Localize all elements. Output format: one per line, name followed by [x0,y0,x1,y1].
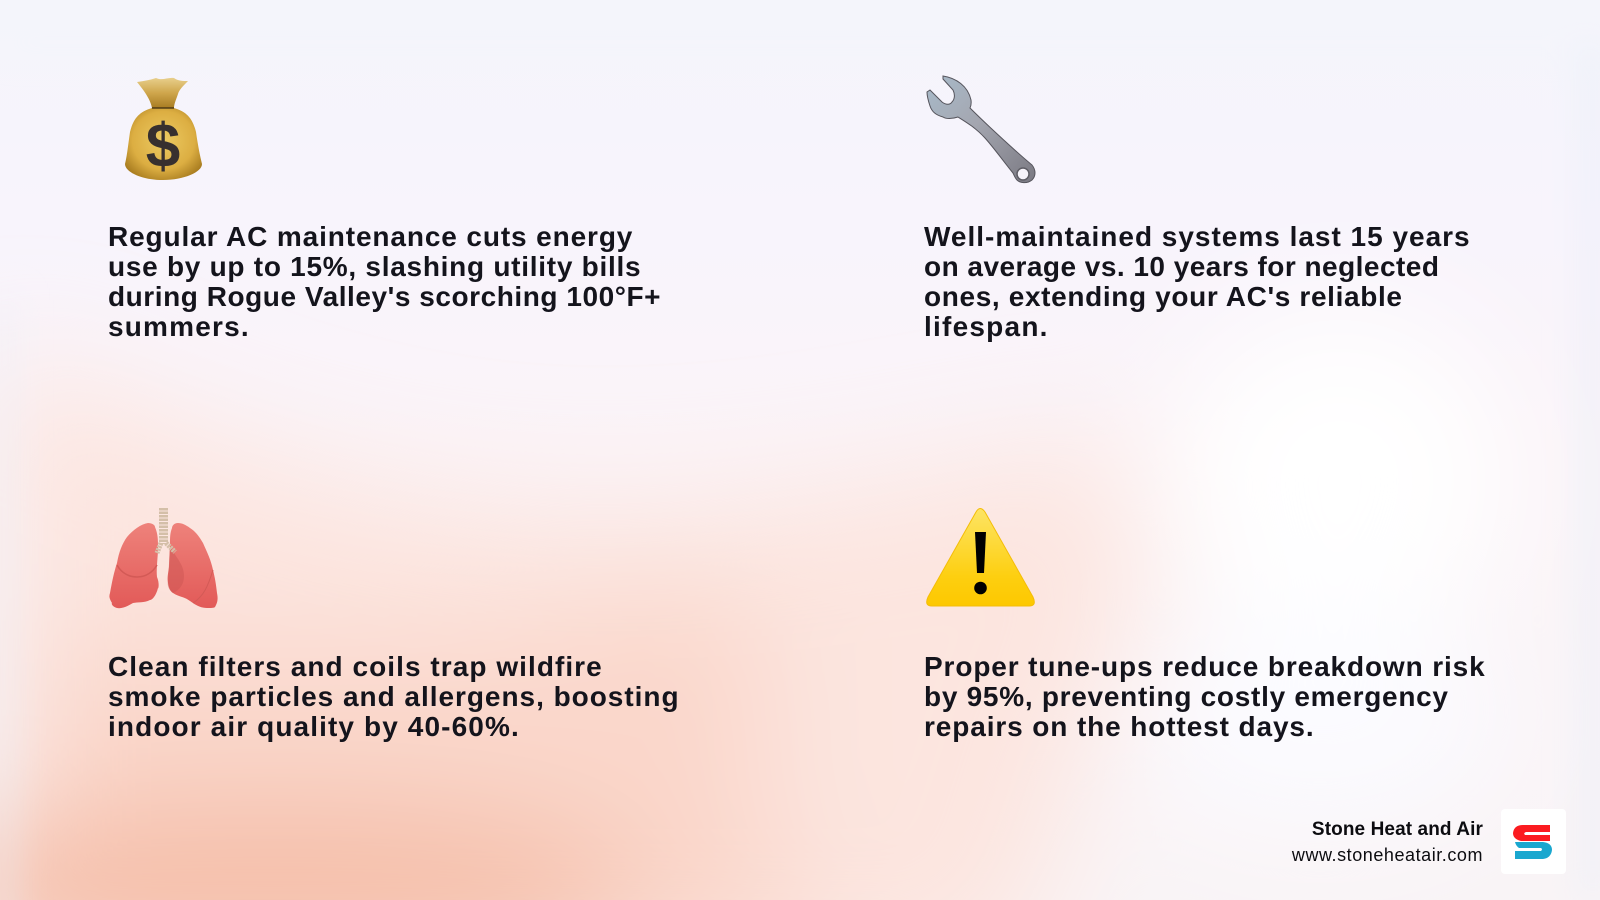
text: energy savings: use by up to 15%, slashing utility bills [108,251,641,282]
text: system lifespan: on average vs. 10 years for neglected [924,251,1439,282]
text: energy savings: during Rogue Valley's scorching 100°F+ [108,281,661,312]
text: energy savings [108,221,661,342]
text: system lifespan [924,221,1471,342]
text: energy savings: Regular AC maintenance cuts energy [108,221,633,252]
brand website: www.stoneheatair.com [1292,845,1483,865]
text: indoor air quality: Clean filters and coils trap wildfire [108,651,603,682]
icon: warning triangle [926,508,1035,606]
icon: lungs [109,508,218,608]
text: breakdown risk: by 95%, preventing costly emergency [924,681,1449,712]
text: breakdown risk: repairs on the hottest days. [924,711,1315,742]
icon: wrench [926,75,1036,184]
logo [1501,809,1566,874]
icon: money bag [125,78,202,181]
text: indoor air quality [108,651,680,742]
icon: money bag: $ [146,112,180,181]
text: breakdown risk: Proper tune-ups reduce breakdown risk [924,651,1486,682]
text: system lifespan: Well-maintained systems last 15 years [924,221,1471,252]
text: system lifespan: ones, extending your AC's reliable [924,281,1403,312]
text: breakdown risk [924,651,1486,742]
text: system lifespan: lifespan. [924,311,1049,342]
trachea [157,508,175,553]
text: indoor air quality: indoor air quality by 40-60%. [108,711,520,742]
brand name: Stone Heat and Air [1312,819,1483,840]
text: indoor air quality: smoke particles and allergens, boosting [108,681,680,712]
text: energy savings: summers. [108,311,250,342]
